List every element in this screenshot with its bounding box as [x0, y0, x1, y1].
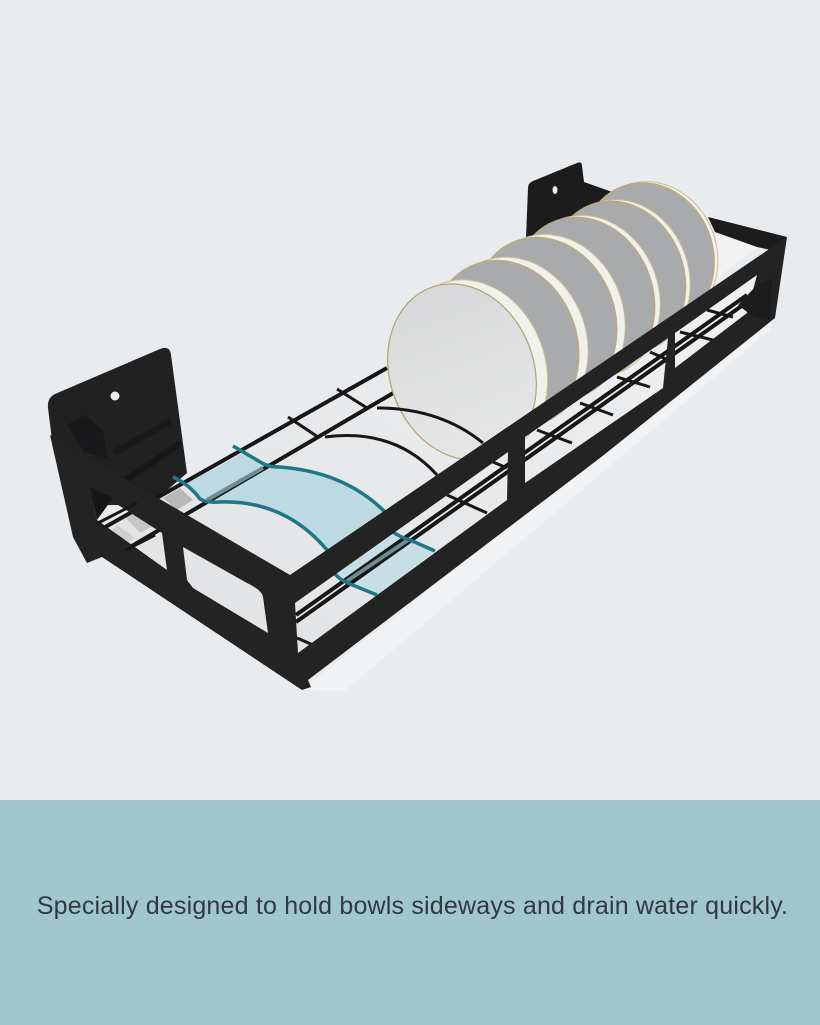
caption text: Specially designed to hold bowls sideways and drain water quickly.	[37, 892, 788, 920]
wire base of rack	[100, 295, 750, 645]
caption band	[0, 800, 820, 1025]
right bracket behind rail end	[738, 278, 772, 320]
plate 4	[491, 195, 683, 399]
plate 5	[529, 180, 711, 374]
front plate	[364, 259, 572, 481]
plate 3	[450, 214, 648, 423]
plate 6	[562, 163, 738, 348]
left hole interior	[90, 487, 155, 550]
glass-tinted wires	[207, 468, 408, 581]
metal pads seen on the wires	[112, 488, 193, 543]
blue highlighted wires	[173, 446, 435, 595]
front and side rail frame	[50, 237, 787, 690]
illustration: black wall-mounted dish rack with plates	[48, 162, 787, 690]
plates	[364, 163, 738, 481]
back mounting plate left	[48, 348, 187, 505]
plate 2	[408, 236, 611, 450]
back end rail	[708, 217, 787, 295]
black arc wires	[325, 408, 483, 475]
blue glass tray	[187, 453, 435, 595]
back mounting plate right	[526, 162, 615, 238]
rack floor	[100, 270, 775, 660]
shadow under the rack	[302, 318, 772, 691]
